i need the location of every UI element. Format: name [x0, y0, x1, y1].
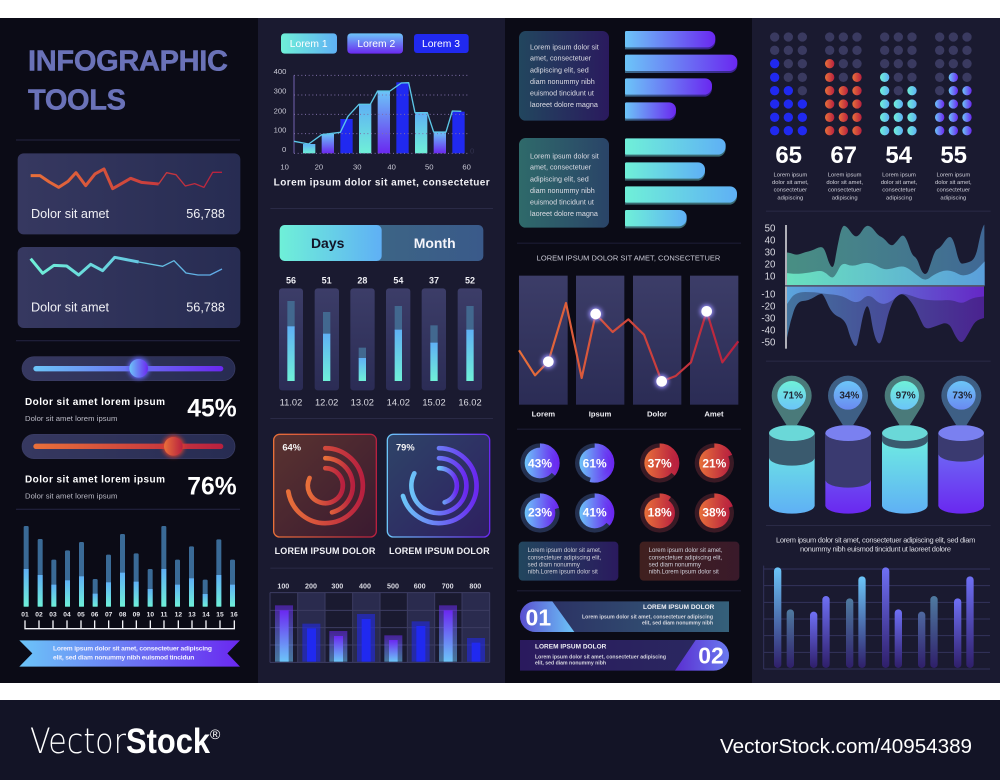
card value: 56,788: [186, 301, 225, 315]
grid bar chart: 400: [359, 582, 371, 590]
banner 02: LOREM IPSUM DOLOR: [535, 643, 607, 650]
panel: red sparkline card: [18, 153, 240, 234]
column 1 upper: title and sparkline cards: [16, 46, 240, 341]
number descriptions: dolor sit amet,: [935, 180, 972, 186]
line chart labels: Lorem: [532, 410, 555, 419]
big numbers: [775, 142, 967, 169]
footer logo: Vector: [30, 722, 127, 762]
bar labels: [21, 612, 238, 619]
number descriptions: dolor sit amet,: [826, 180, 863, 186]
radial card 64 percent: [274, 434, 376, 537]
red sparkline: [31, 169, 222, 189]
line chart labels: Ipsum: [589, 410, 611, 419]
number descriptions: consectetuer: [882, 188, 916, 194]
card label: Dolor sit amet: [31, 301, 110, 315]
banner 01: 01: [526, 604, 551, 630]
cylinder 97 percent: [882, 425, 928, 514]
column bars with values and dates: 56: [286, 275, 296, 285]
text box teal: adipiscing elit, sed: [530, 174, 589, 183]
text box teal: Lorem ipsum dolor sit: [530, 151, 599, 160]
line chart with panels: [519, 276, 738, 419]
slider 76 caption: 76%: [187, 473, 237, 500]
combo chart: 30: [353, 163, 362, 172]
text box teal: laoreet dolore magna: [530, 209, 598, 218]
grid bar chart: 600: [414, 582, 426, 590]
bar labels: 10: [147, 612, 154, 619]
bar labels: 16: [230, 612, 238, 619]
slider 45 caption: Dolor sit amet lorem ipsum: [25, 414, 117, 423]
note box red: sed diam nonummy: [649, 563, 701, 569]
note box red: consectetuer adipiscing elit,: [649, 555, 723, 561]
line chart labels: Amet: [704, 410, 724, 419]
bar labels: 07: [105, 612, 113, 619]
column 4 lower: pins, cylinders, bars: [764, 361, 991, 669]
axis ruler: [25, 620, 234, 629]
text box teal: euismod tincidunt ut: [530, 197, 594, 206]
footer url: VectorStock.com/40954389: [720, 736, 972, 758]
column 3 upper: text boxes, horizontal bars, line chart: [517, 31, 741, 419]
pin 97 percent: [885, 376, 925, 425]
blue percent circles: [520, 443, 614, 533]
bar labels: 13: [188, 612, 196, 619]
bar chart 01-16: [21, 526, 238, 629]
pin 34 percent: 34%: [839, 391, 859, 402]
text box purple: [519, 31, 609, 121]
dot matrix 55: [935, 73, 972, 135]
slider 76 caption: Dolor sit amet lorem ipsum: [25, 492, 117, 501]
dot matrix 67: [825, 59, 862, 135]
note box blue: Lorem ipsum dolor sit amet,: [528, 548, 602, 554]
card label: Dolor sit amet: [31, 207, 110, 221]
banner 02: 02: [698, 642, 724, 668]
panel: column 3 background: [505, 18, 752, 683]
cylinder 34 percent: [825, 425, 871, 514]
number descriptions: Lorem ipsum: [882, 172, 916, 178]
number descriptions: consectetuer: [828, 188, 861, 194]
radial card captions: [275, 546, 490, 556]
slider 45 caption: [25, 396, 237, 423]
text box teal: diam nonummy nibh: [530, 186, 595, 195]
column bars with values and dates: 52: [465, 275, 475, 285]
column bars with values and dates: [279, 275, 482, 407]
number descriptions: adipiscing: [832, 196, 858, 202]
area chart axis labels: 10: [765, 271, 775, 282]
bar labels: 14: [202, 612, 210, 619]
area chart axis labels: -30: [761, 313, 775, 324]
note box blue: sed diam nonummy: [528, 563, 580, 569]
blue sparkline: [31, 257, 222, 275]
line chart heading: LOREM IPSUM DOLOR SIT AMET, CONSECTETUER: [537, 254, 721, 263]
note box blue: nibh.Lorem ipsum dolor sit: [528, 570, 598, 576]
banner 02: Lorem ipsum dolor sit amet, consectetuer adipiscing: [535, 654, 666, 660]
radial card captions: LOREM IPSUM DOLOR: [389, 546, 490, 556]
blue percent circles: 43%: [528, 456, 552, 470]
bar labels: 08: [119, 612, 127, 619]
column 1 lower: sliders, bars, ribbon: [16, 357, 240, 667]
banner 01: Lorem ipsum dolor sit amet, consectetuer adipiscing: [582, 615, 713, 621]
line chart labels: Dolor: [647, 410, 667, 419]
note box red: [640, 542, 739, 581]
pin 97 percent: 97%: [896, 391, 916, 402]
bar labels: 11: [160, 612, 168, 619]
horizontal bars teal-blue: [625, 138, 737, 228]
title: INFOGRAPHIC: [28, 46, 228, 78]
combo chart: 40: [387, 163, 396, 172]
number descriptions: Lorem ipsum: [773, 172, 807, 178]
bar labels: 12: [175, 612, 182, 619]
radial card 64 percent: 64%: [282, 443, 302, 453]
note box red: nibh.Lorem ipsum dolor sit: [649, 570, 719, 576]
paragraph: Lorem ipsum dolor sit amet, consectetuer adipiscing elit, sed diam: [776, 536, 975, 545]
bar labels: 05: [77, 612, 85, 619]
cylinder 71 percent: [769, 425, 815, 514]
pin 71 percent: 71%: [783, 391, 803, 402]
dot matrix 54: [880, 73, 917, 135]
pin 71 percent: [772, 376, 812, 425]
column 2 lower: radial cards and grid bars: [270, 418, 493, 662]
number descriptions: [772, 172, 972, 202]
bar labels: 04: [63, 612, 71, 619]
big numbers: 67: [830, 142, 857, 169]
blue percent circles: 23%: [528, 506, 552, 520]
column 3 lower: percent circles, notes, banners: [517, 429, 741, 671]
radial card 79 percent: [387, 434, 490, 537]
radial card 79 percent: 79%: [396, 443, 415, 453]
combo chart: 300: [274, 87, 286, 96]
banner 02: [520, 640, 729, 671]
text box purple: Lorem ipsum dolor sit: [530, 42, 599, 51]
text box teal: amet, consectetuer: [530, 163, 592, 172]
banner 01: [520, 601, 729, 632]
paragraph: [776, 536, 975, 554]
combo chart: 0: [470, 146, 474, 155]
red percent circles: 21%: [702, 456, 727, 470]
legend buttons: Lorem 3: [422, 39, 460, 50]
red percent circles: 18%: [648, 506, 672, 520]
banner 01: elit, sed diam nonummy nibh: [642, 621, 713, 627]
legend buttons: Lorem 1: [290, 39, 328, 50]
area chart axis labels: -10: [761, 289, 775, 300]
note box blue: consectetuer adipiscing elit,: [528, 555, 602, 561]
footer logo: [30, 722, 221, 762]
footer band: [0, 700, 1000, 780]
combo chart: [274, 67, 474, 172]
combo chart: 100: [274, 126, 286, 135]
toggle days / month: Days: [311, 235, 345, 251]
combo chart: 50: [425, 163, 434, 172]
title: [28, 46, 228, 117]
area chart axis labels: 40: [765, 235, 775, 246]
bar labels: 01: [21, 612, 29, 619]
ribbon banner: elit, sed diam nonummy nibh euismod tincidun: [53, 655, 194, 662]
column bars with values and dates: 15.02: [422, 397, 446, 407]
slider 76 percent: [22, 434, 235, 459]
combo chart: 60: [462, 163, 471, 172]
slider 45 caption: Dolor sit amet lorem ipsum: [25, 397, 165, 408]
grid bar chart: 100: [277, 582, 289, 590]
horizontal bars blue-purple: [625, 31, 737, 121]
text box purple: amet, consectetuer: [530, 54, 592, 63]
big numbers: 54: [885, 142, 913, 169]
number descriptions: adipiscing: [940, 196, 966, 202]
line chart labels: [532, 410, 724, 419]
number descriptions: adipiscing: [886, 196, 912, 202]
number descriptions: dolor sit amet,: [772, 180, 809, 186]
text box teal: [519, 138, 609, 228]
panel: column 4 background: [752, 18, 1000, 683]
red percent circles: [640, 443, 734, 533]
number descriptions: Lorem ipsum: [936, 172, 970, 178]
chart caption: Lorem ipsum dolor sit amet, consectetuer: [274, 178, 490, 189]
text box purple: adipiscing elit, sed: [530, 65, 589, 74]
panel: column 2 background: [258, 18, 505, 683]
column bars with values and dates: 37: [429, 275, 439, 285]
ribbon banner: [19, 640, 240, 667]
bar labels: 15: [216, 612, 224, 619]
text box purple: laoreet dolore magna: [530, 100, 598, 109]
pin 34 percent: [828, 376, 868, 425]
column 2 upper: combo chart, toggle, bars: [270, 33, 493, 407]
number descriptions: dolor sit amet,: [881, 180, 918, 186]
bar labels: 09: [133, 612, 140, 619]
column bars with values and dates: 28: [357, 275, 367, 285]
panel: column 1 background: [0, 18, 258, 683]
column bars with values and dates: 11.02: [280, 397, 302, 407]
note box red: Lorem ipsum dolor sit amet,: [649, 548, 723, 554]
footer logo: Stock: [126, 722, 210, 761]
text box purple: euismod tincidunt ut: [530, 88, 594, 97]
red percent circles: 37%: [648, 456, 672, 470]
dot matrix 65: [770, 59, 807, 135]
blue percent circles: 41%: [583, 506, 607, 520]
big numbers: 65: [775, 142, 802, 169]
number descriptions: consectetuer: [774, 188, 807, 194]
bar labels: 02: [35, 612, 43, 619]
area chart axis labels: -40: [761, 325, 775, 336]
column 4 upper: dot matrices and area chart: [761, 32, 991, 349]
cylinder 73 percent: [938, 425, 984, 514]
column bars with values and dates: 13.02: [351, 397, 374, 407]
area chart axis labels: 50: [765, 223, 775, 234]
banner 02: elit, sed diam nonummy nibh: [535, 660, 606, 666]
bar labels: 06: [91, 612, 99, 619]
combo chart: 200: [274, 106, 286, 115]
pin 73 percent: 73%: [952, 391, 972, 402]
legend buttons: [281, 33, 469, 54]
footer logo: ®: [210, 726, 221, 742]
area chart axis labels: -50: [761, 337, 775, 348]
column bars with values and dates: 51: [322, 275, 332, 285]
combo chart: 20: [315, 163, 323, 172]
grid bar chart: 200: [305, 582, 317, 590]
area chart axis labels: [761, 223, 775, 348]
grid bar chart: 800: [469, 582, 481, 590]
slider 76 caption: [25, 473, 237, 501]
highlighted points: [542, 305, 713, 388]
dot matrix unfilled: [770, 32, 972, 95]
card value: 56,788: [186, 207, 225, 221]
area chart axis labels: -20: [761, 301, 775, 312]
number descriptions: consectetuer: [937, 188, 970, 194]
grid bar chart: [270, 582, 490, 662]
area chart axis labels: 30: [765, 247, 775, 258]
combo chart: 400: [274, 67, 286, 76]
area chart: [761, 223, 985, 349]
grid bar chart: 500: [387, 582, 399, 590]
combo chart: 10: [280, 163, 289, 172]
red percent circles: 38%: [702, 506, 727, 520]
pin 73 percent: [941, 376, 981, 425]
area chart axis labels: 20: [765, 259, 775, 270]
note box blue: [519, 542, 618, 581]
column bars with values and dates: 54: [393, 275, 403, 285]
rounded bar chart: [764, 566, 990, 669]
grid bar chart: 300: [331, 582, 343, 590]
banner 01: LOREM IPSUM DOLOR: [643, 604, 715, 611]
toggle days / month: [280, 225, 483, 261]
number descriptions: Lorem ipsum: [828, 172, 862, 178]
number descriptions: adipiscing: [777, 196, 803, 202]
radial card captions: LOREM IPSUM DOLOR: [275, 546, 376, 556]
toggle days / month: Month: [414, 235, 456, 251]
ribbon banner: Lorem ipsum dolor sit amet, consectetuer adipiscing: [53, 646, 212, 653]
title: TOOLS: [28, 85, 126, 117]
column bars with values and dates: 16.02: [458, 397, 482, 407]
slider 76 caption: Dolor sit amet lorem ipsum: [25, 475, 165, 486]
combo chart: 0: [282, 145, 286, 154]
column bars with values and dates: 14.02: [387, 397, 410, 407]
blue percent circles: 61%: [583, 456, 607, 470]
bar labels: 03: [49, 612, 57, 619]
big numbers: 55: [940, 142, 967, 169]
paragraph: nonummy nibh euismod tincidunt ut laoreet dolore: [800, 545, 951, 554]
legend buttons: Lorem 2: [357, 39, 396, 50]
panel: blue sparkline card: [18, 247, 240, 328]
column bars with values and dates: 12.02: [315, 397, 338, 407]
slider 45 percent: [22, 357, 235, 381]
slider 45 caption: 45%: [187, 396, 237, 423]
grid bar chart: 700: [442, 582, 454, 590]
text box purple: diam nonummy nibh: [530, 77, 595, 86]
